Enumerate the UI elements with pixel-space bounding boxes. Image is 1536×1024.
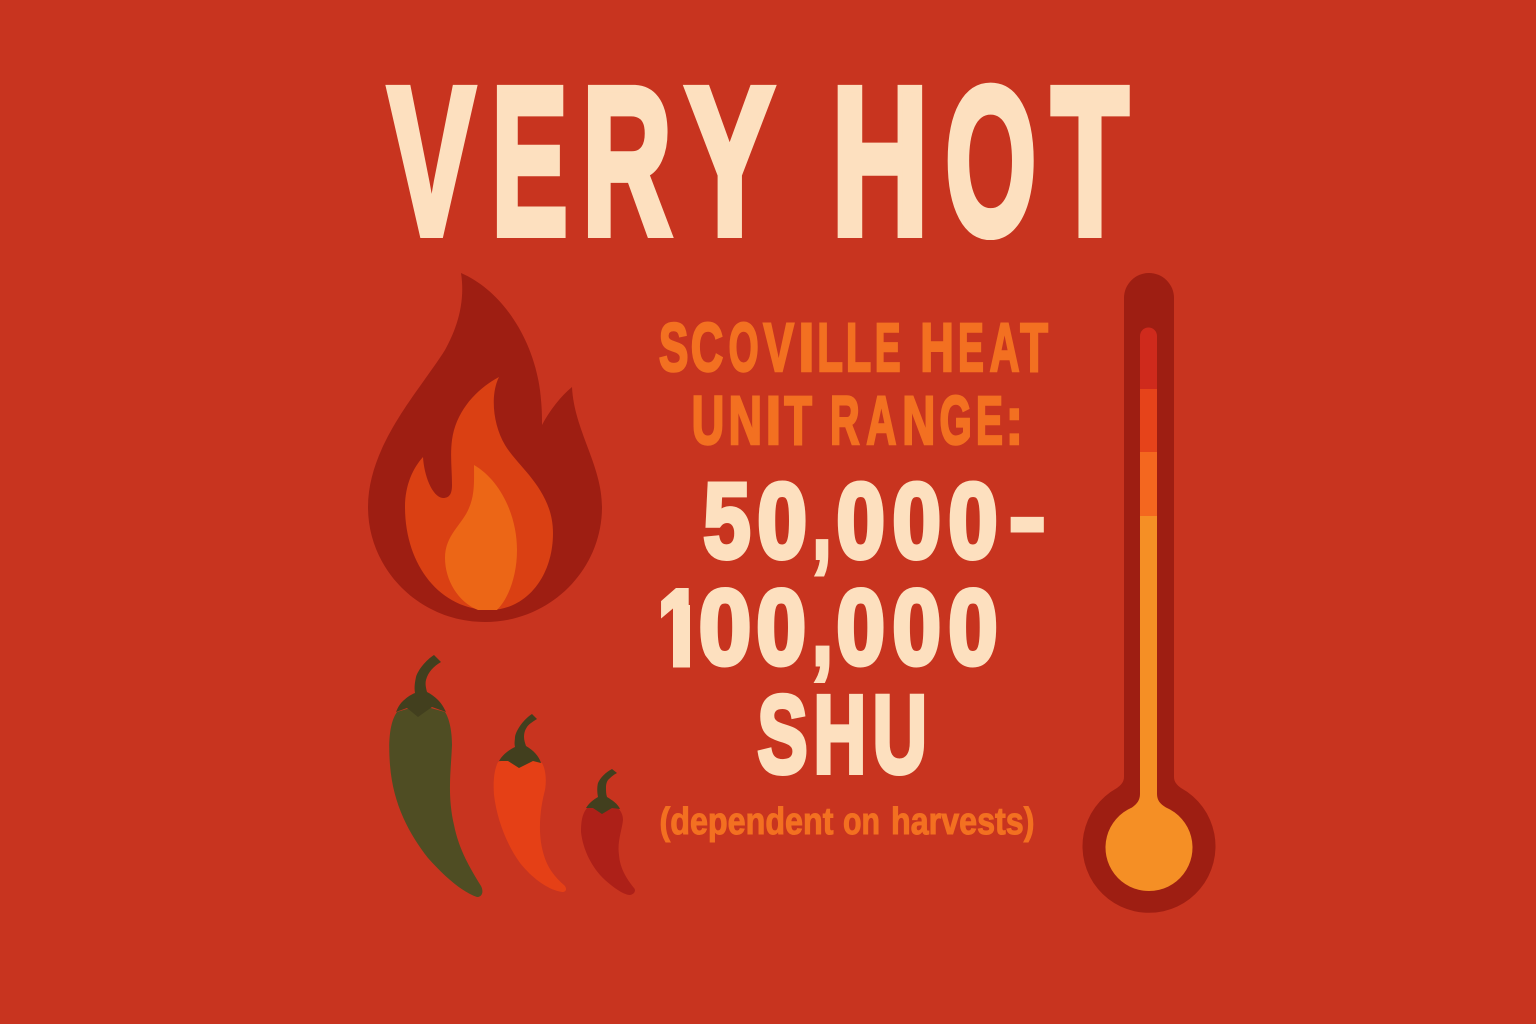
range value: 50,000–100,000 SHU: 0 (836, 460, 885, 580)
heading: Scoville heat unit range: N (902, 382, 935, 459)
range value: 50,000–100,000 SHU: 0 (892, 460, 941, 580)
heading: Scoville heat unit range: I (798, 309, 815, 386)
range value: 50,000–100,000 SHU: – (1010, 456, 1044, 576)
heading: Scoville heat unit range (659, 309, 1048, 459)
range value: 50,000–100,000 SHU: H (814, 674, 866, 796)
heading: Scoville heat unit range: E (875, 309, 901, 386)
heading: Scoville heat unit range: T (784, 382, 812, 459)
title: E (491, 43, 568, 279)
thermometer casing (1083, 273, 1215, 913)
icon: orange chili pepper (494, 714, 566, 892)
icon: thermometer (1083, 273, 1215, 913)
heading: Scoville heat unit range: T (1020, 309, 1048, 386)
title: T (1051, 43, 1129, 279)
icon: red chili pepper (581, 769, 635, 895)
range value: 50,000–100,000 SHU: 0 (757, 460, 807, 580)
heading: Scoville heat unit range: N (728, 382, 762, 459)
heading: Scoville heat unit range: O (729, 309, 759, 386)
thermometer fill: orange-red segment (1140, 389, 1157, 452)
heading: Scoville heat unit range: S (659, 309, 688, 386)
heading: Scoville heat unit range: C (691, 309, 723, 386)
heading: Scoville heat unit range: : (1005, 382, 1023, 459)
range value: 50,000–100,000 SHU: S (757, 674, 808, 796)
range value: 50,000–100,000 SHU: 0 (892, 567, 941, 687)
heading: Scoville heat unit range: I (766, 382, 781, 459)
icon: flame (368, 273, 602, 622)
range value: 50,000–100,000 SHU: 0 (699, 567, 751, 687)
note: dependent on harvests: harvests) (891, 801, 1034, 843)
heading: Scoville heat unit range: U (692, 382, 724, 459)
heading: Scoville heat unit range: R (830, 382, 860, 459)
thermometer fill: red segment (1140, 328, 1157, 389)
range value: 50,000–100,000 SHU: , (813, 460, 831, 580)
icon: green chili pepper (389, 655, 482, 897)
range value: 50,000–100,000 SHU: 0 (756, 567, 806, 687)
heading: Scoville heat unit range: G (940, 382, 972, 459)
range value: 50,000–100,000 SHU: , (812, 567, 833, 687)
thermometer fill: amber column and bulb (1105, 516, 1192, 891)
title: R (582, 43, 672, 279)
heading: Scoville heat unit range: V (763, 309, 794, 386)
heading: Scoville heat unit range: L (817, 309, 843, 386)
heading: Scoville heat unit range: H (920, 309, 954, 386)
title: V (388, 43, 475, 279)
note: dependent on harvests: on (843, 801, 880, 843)
title: O (945, 43, 1036, 279)
heading: Scoville heat unit range: L (846, 309, 871, 386)
heading: Scoville heat unit range: E (958, 309, 984, 386)
thermometer fill: orange segment (1140, 452, 1157, 516)
note: dependent on harvests: (dependent (660, 801, 834, 843)
range value: 50,000–100,000 SHU: 0 (948, 567, 998, 687)
range value: 50,000–100,000 SHU: 0 (836, 567, 885, 687)
range value: 50,000–100,000 SHU: 5 (703, 460, 751, 580)
heading: Scoville heat unit range: E (976, 382, 1003, 459)
heading: Scoville heat unit range: A (990, 309, 1020, 386)
range value: 50,000–100,000 SHU: 0 (948, 460, 998, 580)
title: H (831, 43, 929, 279)
range value: 50,000–100,000 SHU (650, 456, 1044, 796)
range value: 50,000–100,000 SHU: U (873, 674, 927, 796)
title: Y (685, 43, 773, 279)
range value: 50,000–100,000 SHU: 1 (658, 567, 702, 687)
heading: Scoville heat unit range: A (866, 382, 896, 459)
